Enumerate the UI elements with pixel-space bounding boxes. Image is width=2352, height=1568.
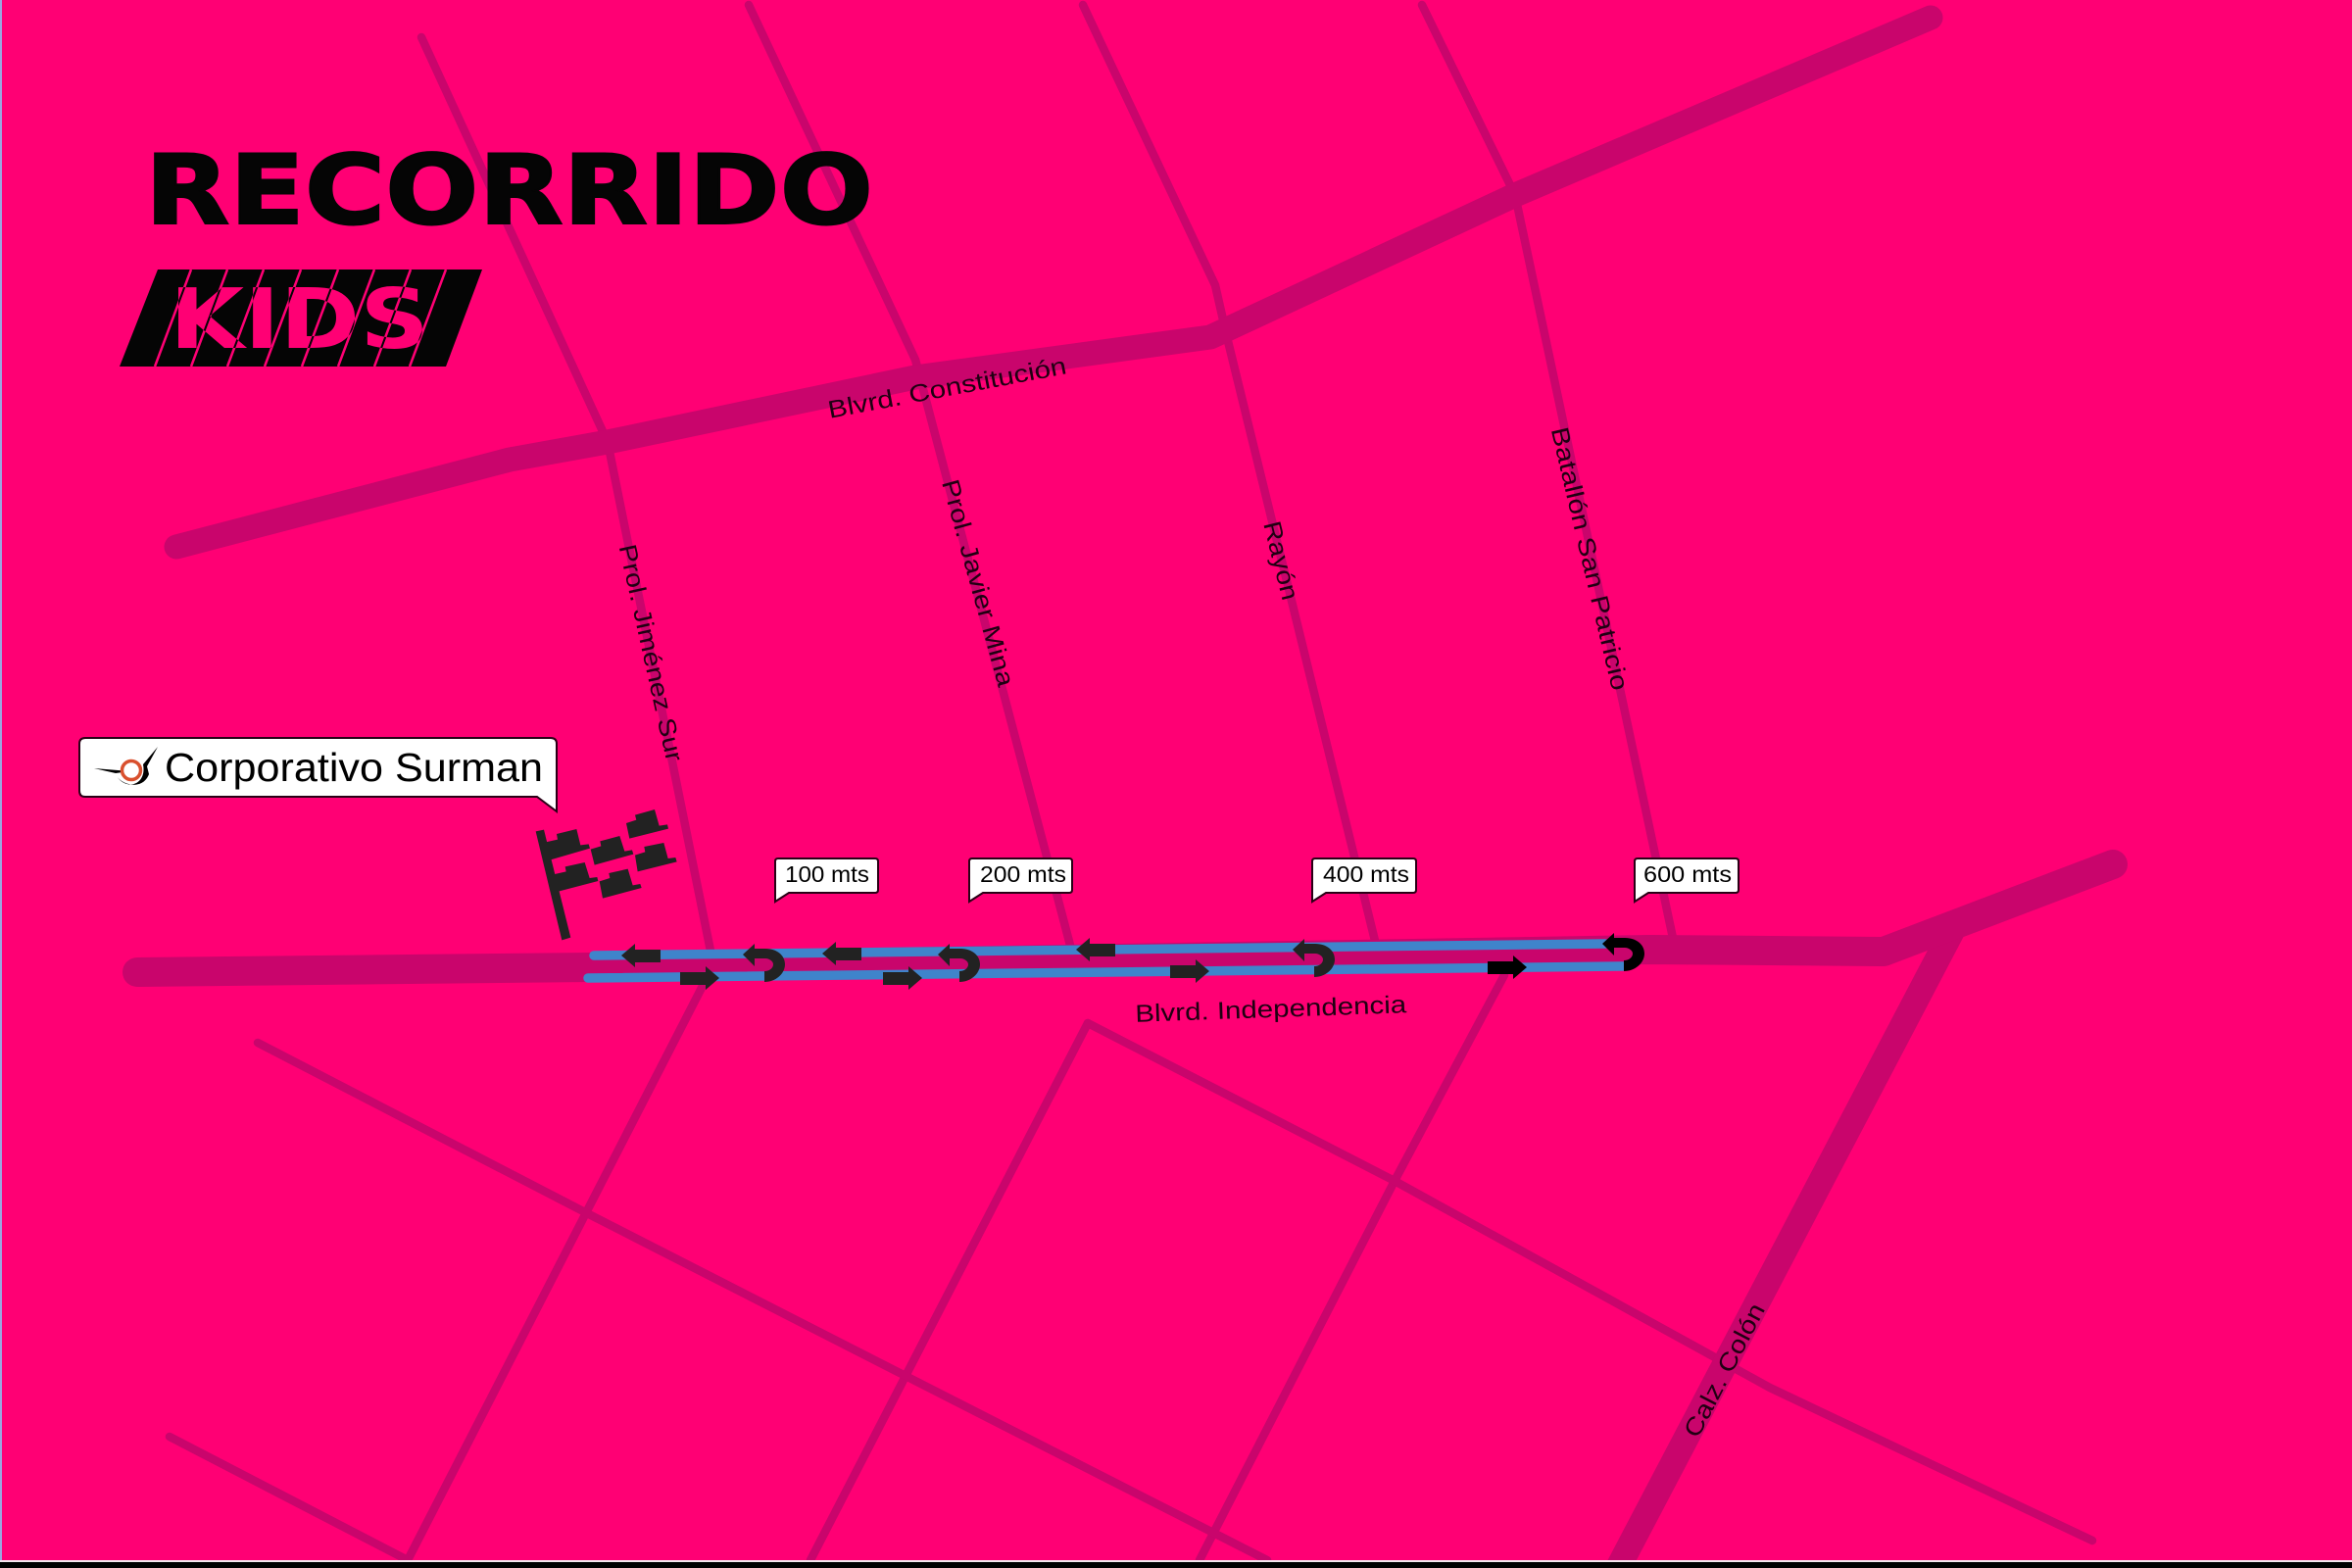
distance callout: 400 mts: 400 mts [1323,861,1409,887]
badge stripes [155,270,446,367]
label: Blvrd. Independencia: Blvrd. Independencia [1135,991,1407,1028]
u-turn 1 [743,944,785,982]
arrow: east 2 [883,966,922,990]
arrow: west 3 [1076,938,1115,961]
road: Calz. Colón [1618,931,1952,1568]
badge parallelogram [120,270,482,367]
title: RECORRIDO [145,135,873,247]
label: Rayón: Rayón [1257,518,1303,603]
arrow: west 2 [822,942,861,965]
distance callout: 100 mts: 100 mts [785,861,869,887]
u-turn 4 [1602,933,1644,971]
icon: Surman logo [94,747,158,785]
arrow: west 1 [621,944,661,967]
distance callout: 400 mts [1312,858,1416,902]
route: blue lines [588,944,1623,978]
distance callout: 600 mts [1635,858,1739,902]
road: Blvrd. Independencia [137,864,2113,972]
callout: Corporativo Surman [79,738,557,811]
label: Prol. Jiménez Sur: Prol. Jiménez Sur [613,542,688,764]
road: lower diagonal one [258,1043,1267,1560]
badge stripes over letters [178,286,422,349]
badge text: KIDS [170,271,429,368]
u-turn 3 [1293,939,1335,977]
arrow: east 1 [680,966,719,990]
distance callout: 200 mts [969,858,1072,902]
flag pole [536,830,570,940]
icon: checkered flag [536,809,677,940]
callout bubble [79,738,557,811]
distance callout: 200 mts: 200 mts [980,861,1066,887]
road: lower diagonal three [170,1437,408,1560]
road: Batallón San Patricio [1422,5,1673,938]
route arrows [621,933,1644,990]
arrow: east 4 [1488,956,1527,979]
label: Calz. Colón: Calz. Colón [1679,1298,1771,1442]
label: Blvrd. Constitución: Blvrd. Constitución [826,352,1068,424]
label: Batallón San Patricio: Batallón San Patricio [1545,424,1634,693]
road: Prol. Jiménez Sur [408,37,712,1560]
distance callout: 100 mts [775,858,878,902]
distance callout: 600 mts: 600 mts [1643,861,1732,887]
kids badge [120,270,482,368]
callout text: Corporativo Surman [165,745,543,790]
route: westbound lane [594,944,1605,956]
road: Prol. Javier Mina [749,5,1088,1560]
street labels [613,352,1771,1442]
road: Rayón [1083,5,1504,1560]
flag checks [543,809,677,899]
label: Prol. Javier Mina: Prol. Javier Mina [936,476,1019,690]
road: lower diagonal two [1088,1023,2092,1541]
route: eastbound lane [588,966,1623,978]
arrow: east 3 [1170,959,1209,983]
u-turn 2 [938,944,980,982]
road: Blvrd. Constitución [176,18,1931,547]
